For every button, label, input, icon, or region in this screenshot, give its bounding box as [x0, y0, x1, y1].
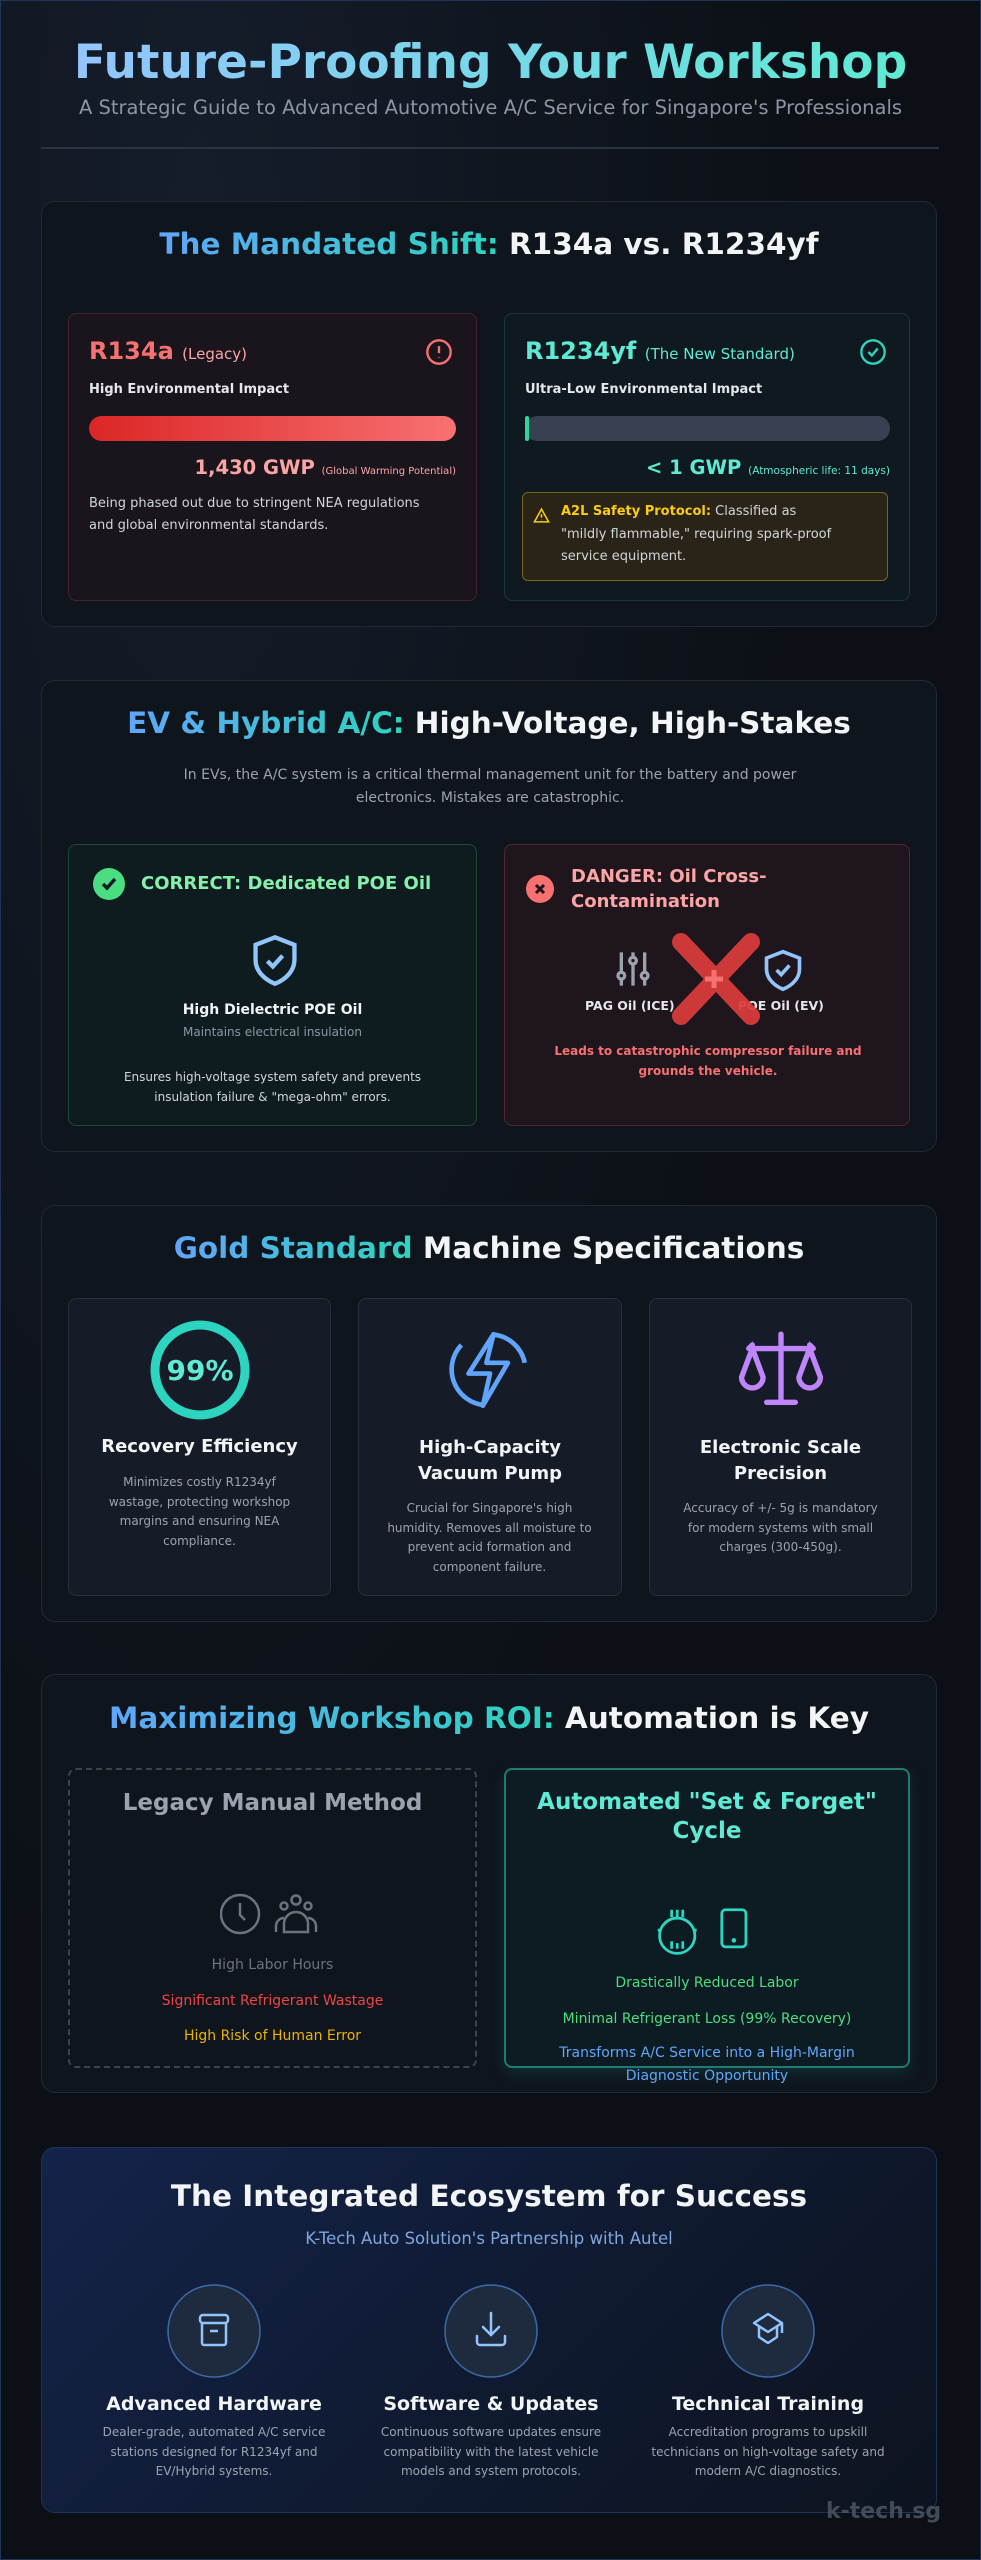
- card: legacy manual: High Labor Hours: [212, 1957, 333, 1973]
- subtitle: K-Tech Auto Solution's Partnership with Autel: [305, 2229, 673, 2248]
- item: software: Software & Updates: [383, 2393, 599, 2415]
- card: electronic scale: Precision: [734, 1463, 827, 1484]
- item: hardware: Dealer-grade, automated A/C service stations designed for R1234yf and EV/Hybrid systems.: [103, 2425, 325, 2478]
- item: software: Continuous software updates ensure compatibility with the latest vehicle models and system protocols.: [381, 2425, 601, 2478]
- card: automated cycle: Automated "Set & Forget": [537, 1789, 877, 1815]
- card: vacuum pump: [358, 1298, 622, 1596]
- card: R134a: High Environmental Impact: [89, 382, 289, 397]
- card: vacuum pump: High-Capacity: [419, 1437, 561, 1458]
- card: legacy manual: Legacy Manual Method: [123, 1790, 422, 1816]
- card: correct POE oil: [68, 844, 477, 1126]
- card: automated cycle: Cycle: [672, 1818, 742, 1844]
- icon: red x: [526, 875, 554, 903]
- heading: Gold Standard Machine Specifications: [174, 1231, 804, 1265]
- title: Future-Proofing Your Workshop: [74, 35, 907, 90]
- card: recovery efficiency: [68, 1298, 331, 1596]
- heading: The Mandated Shift: R134a vs. R1234yf: [159, 227, 819, 261]
- bar: [525, 416, 890, 441]
- callout: A2L safety protocol: A2L Safety Protocol: Classified as: [561, 504, 796, 519]
- card: danger cross-contamination: POE Oil (EV): [738, 998, 824, 1013]
- icon: clock and people: [220, 1894, 318, 1934]
- card: legacy manual: Significant Refrigerant Wastage: [162, 1993, 383, 2009]
- item: software: [381, 2284, 601, 2478]
- callout: A2L safety protocol: "mildly flammable," requiring spark-proof service equipment.: [561, 526, 831, 564]
- icon: download: [444, 2284, 538, 2378]
- icon: sliders: [616, 952, 650, 986]
- card: automated cycle: Transforms A/C Service into a High-Margin Diagnostic Opportunity: [559, 2045, 855, 2084]
- card: correct POE oil: Maintains electrical insulation: [183, 1025, 362, 1039]
- heading: The Integrated Ecosystem for Success: [171, 2179, 807, 2213]
- icon: scale: [738, 1332, 824, 1405]
- item: training: Accreditation programs to upskill technicians on high-voltage safety and modern A/C diagnostics.: [651, 2425, 885, 2478]
- card: electronic scale: Electronic Scale: [700, 1437, 861, 1458]
- subtitle: A Strategic Guide to Advanced Automotive A/C Service for Singapore's Professionals: [79, 96, 902, 119]
- card: danger cross-contamination: DANGER: Oil Cross-: [571, 866, 767, 887]
- card: R1234yf: < 1 GWP (Atmospheric life: 11 days): [646, 456, 890, 479]
- card: automated cycle: [504, 1768, 910, 2068]
- panel: machine specs: [41, 1205, 937, 1622]
- card: R134a: 1,430 GWP (Global Warming Potential): [195, 456, 456, 479]
- card: danger cross-contamination: PAG Oil (ICE): [585, 998, 675, 1013]
- icon: 99% ring: [150, 1320, 250, 1420]
- item: hardware: Advanced Hardware: [106, 2393, 322, 2415]
- card: danger cross-contamination: [504, 844, 910, 1126]
- card: danger cross-contamination: Leads to catastrophic compressor failure and grounds the vehicle.: [554, 1044, 862, 1078]
- card: R1234yf: Ultra-Low Environmental Impact: [525, 382, 762, 397]
- card: legacy manual: High Risk of Human Error: [184, 2028, 361, 2044]
- icon: bolt circle: [449, 1332, 527, 1408]
- item: hardware: [103, 2284, 325, 2478]
- item: training: Technical Training: [672, 2393, 864, 2415]
- card: R134a: Being phased out due to stringent NEA regulations and global environmental standards.: [89, 496, 420, 533]
- callout: A2L safety protocol: [522, 492, 888, 581]
- panel: ROI: [41, 1674, 937, 2093]
- card: correct POE oil: CORRECT: Dedicated POE Oil: [141, 873, 431, 894]
- icon: green check: [93, 868, 125, 900]
- card: R134a: [68, 313, 477, 601]
- card: R134a: R134a (Legacy): [89, 337, 247, 365]
- icon: alert: [426, 339, 452, 365]
- panel: mandated shift: [41, 201, 937, 627]
- card: vacuum pump: Crucial for Singapore's high humidity. Removes all moisture to prevent acid formation and component failure.: [387, 1501, 592, 1574]
- card: legacy manual: [68, 1768, 477, 2068]
- icon: robot and tablet: [658, 1908, 748, 1955]
- card: vacuum pump: Vacuum Pump: [418, 1463, 562, 1484]
- card: automated cycle: Drastically Reduced Labor: [615, 1975, 799, 1991]
- card: R1234yf: [504, 313, 910, 601]
- card: danger cross-contamination: Contamination: [571, 891, 720, 912]
- card: correct POE oil: High Dielectric POE Oil: [183, 1002, 362, 1018]
- card: correct POE oil: Ensures high-voltage system safety and prevents insulation failure & "mega-ohm" errors.: [124, 1070, 421, 1104]
- icon: archive box: [167, 2284, 261, 2378]
- watermark: k-tech.sg: [826, 2499, 941, 2524]
- panel: ecosystem: [41, 2147, 937, 2513]
- panel: EV & Hybrid: [41, 680, 937, 1152]
- card: electronic scale: Accuracy of +/- 5g is mandatory for modern systems with small charges (300-450g).: [683, 1501, 878, 1554]
- card: R1234yf: R1234yf (The New Standard): [525, 337, 795, 365]
- card: automated cycle: Minimal Refrigerant Loss (99% Recovery): [563, 2011, 851, 2027]
- item: training: [651, 2284, 885, 2478]
- heading: EV & Hybrid A/C: High-Voltage, High-Stakes: [127, 706, 851, 740]
- icon: shield: [253, 935, 297, 986]
- icon: 99% ring: 99%: [166, 1354, 234, 1387]
- icon: shield EV: [764, 950, 802, 992]
- icon: graduation cap: [721, 2284, 815, 2378]
- icon: big red cross: [672, 933, 760, 1025]
- card: recovery efficiency: Minimizes costly R1234yf wastage, protecting workshop margins and ensuring NEA compliance.: [109, 1475, 290, 1548]
- card: electronic scale: [649, 1298, 912, 1596]
- icon: check: [860, 339, 886, 365]
- intro text: In EVs, the A/C system is a critical thermal management unit for the battery and power electronics. Mistakes are catastrophic.: [184, 767, 796, 806]
- card: recovery efficiency: Recovery Efficiency: [101, 1436, 298, 1457]
- bar: [89, 416, 456, 441]
- heading: Maximizing Workshop ROI: Automation is Key: [109, 1701, 869, 1735]
